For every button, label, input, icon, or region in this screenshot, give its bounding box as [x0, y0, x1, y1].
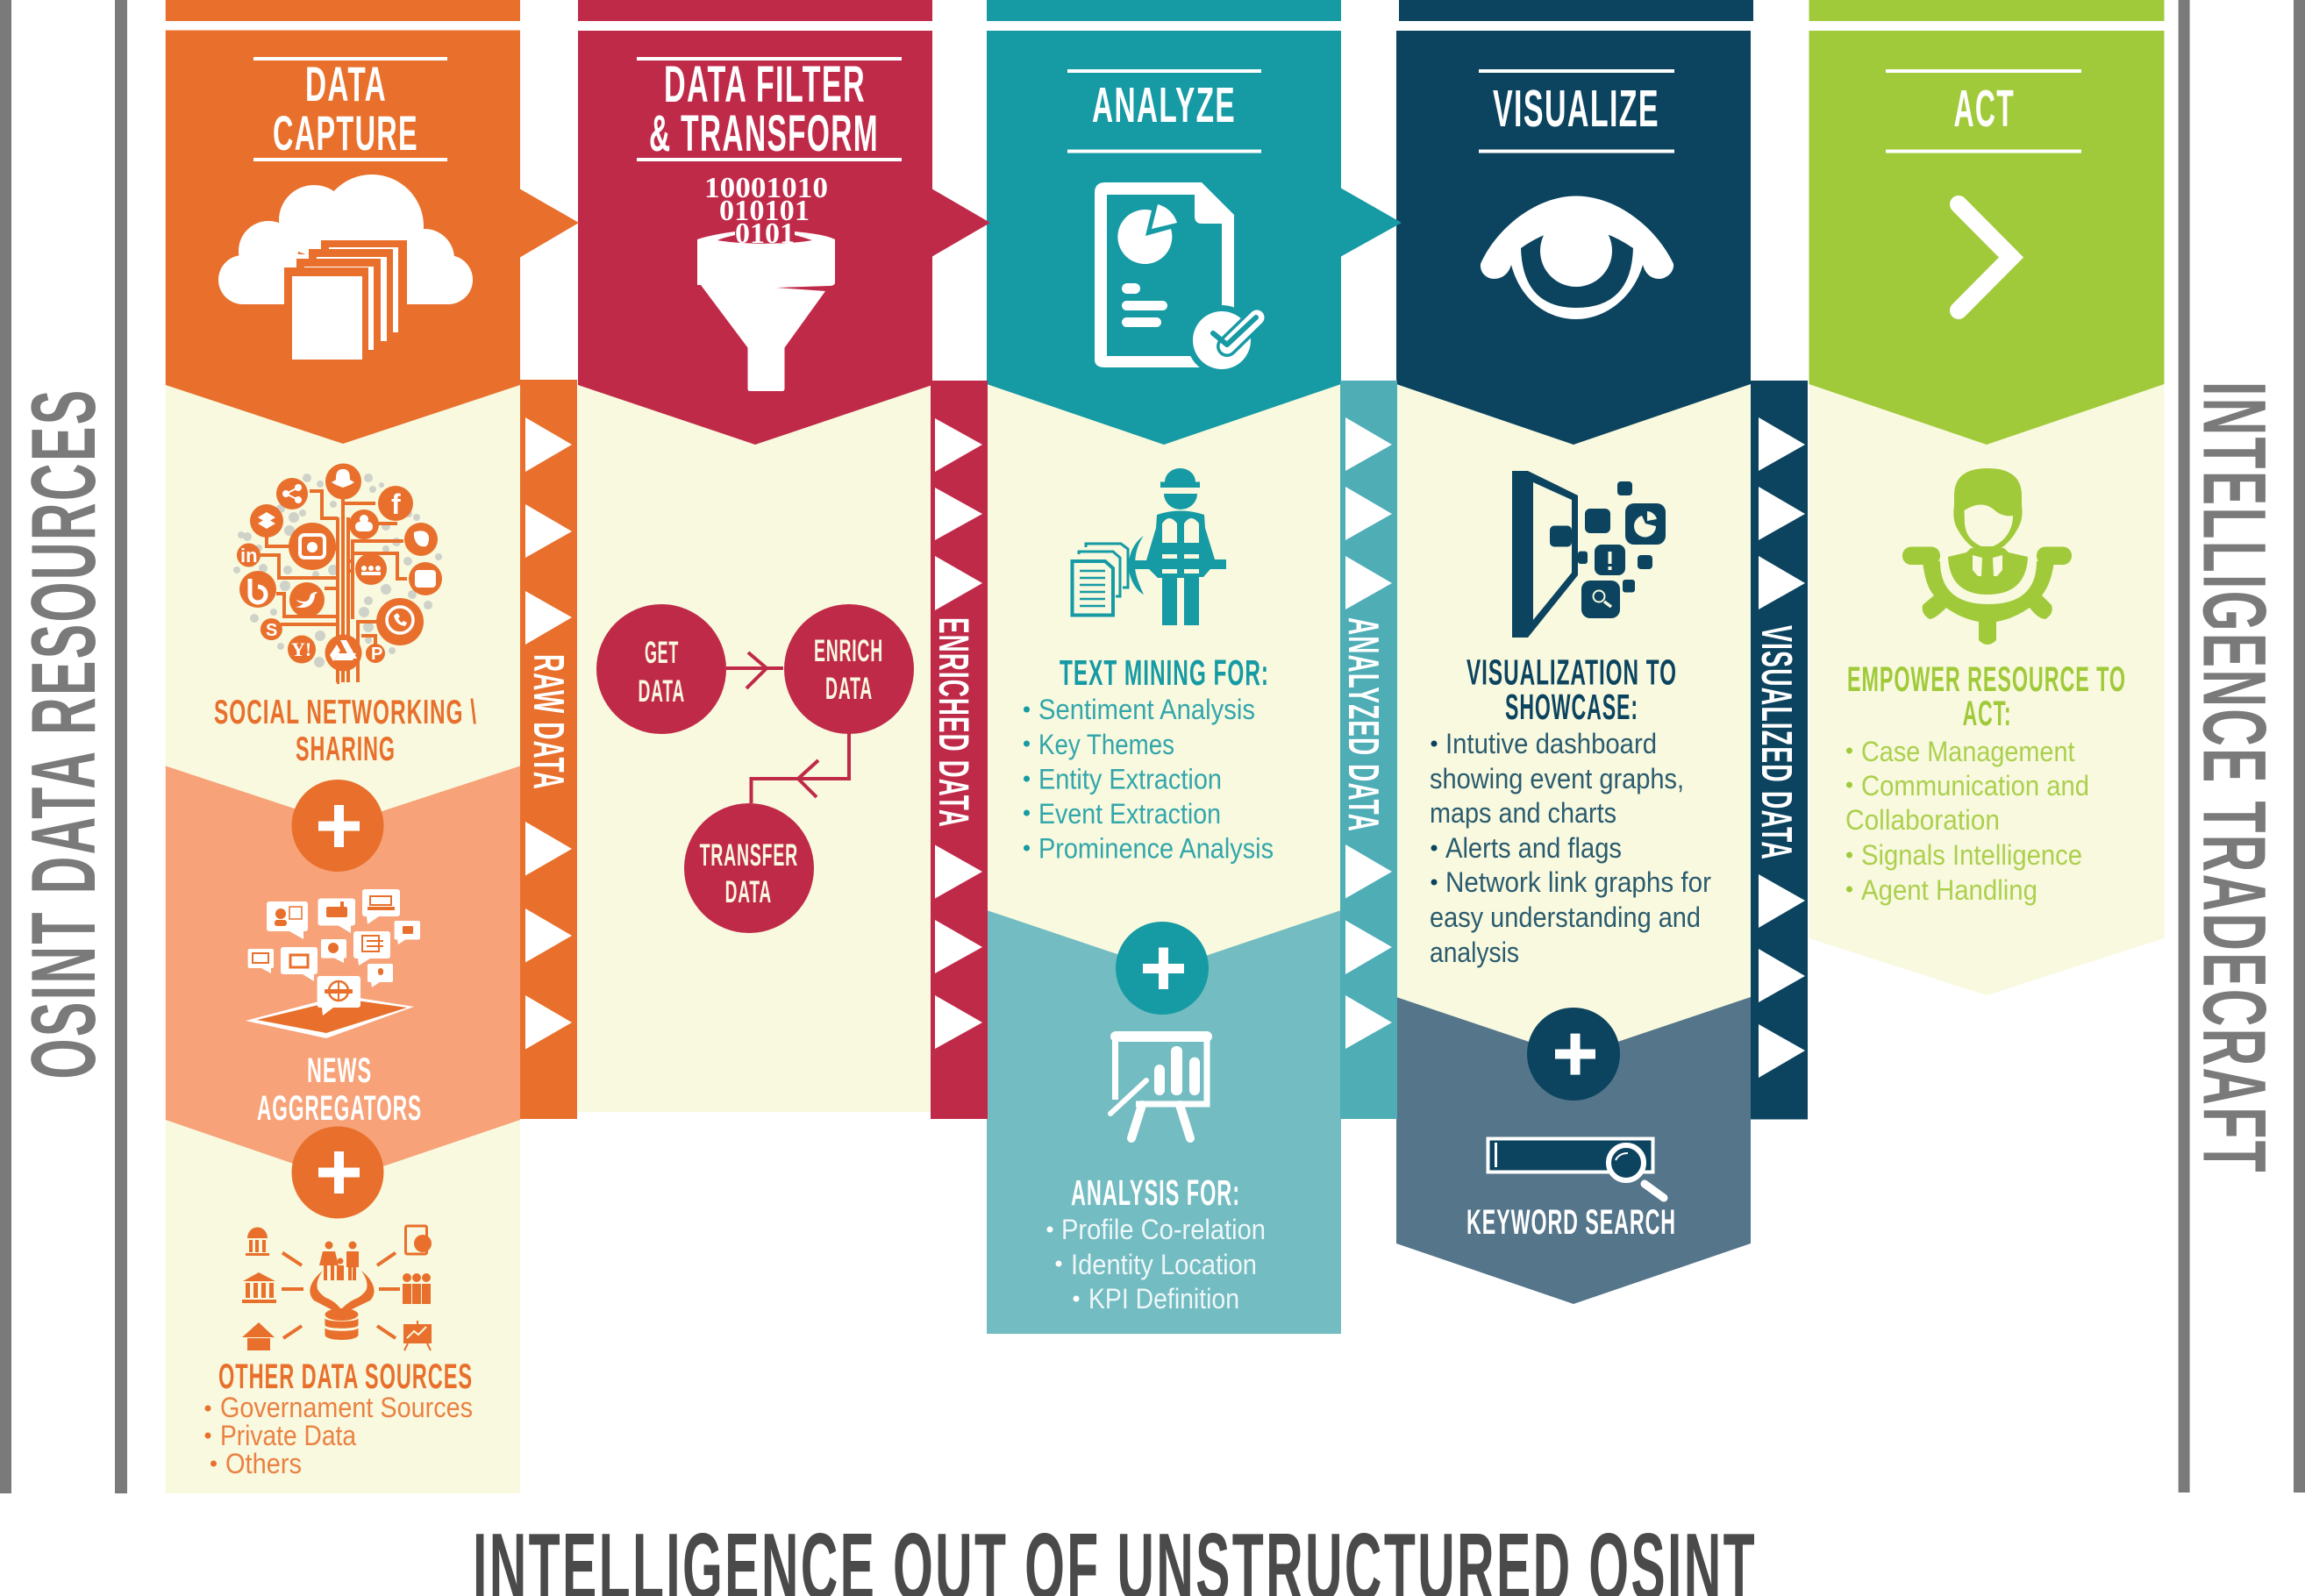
connector strip: visualized data	[1751, 381, 1808, 1119]
text block: visualization to showcase: showing event graphs,	[1430, 763, 1684, 794]
text block: text mining: Event Extraction	[1038, 798, 1221, 830]
text block: text mining: Prominence Analysis	[1038, 833, 1274, 865]
text block: empower resource to act: Collaboration	[1845, 804, 2000, 836]
step: transfer data: TRANSFER	[700, 838, 798, 873]
panel: visualize	[1396, 0, 1753, 1304]
panel: analyze	[987, 0, 1341, 1334]
connector strip: raw data	[520, 380, 577, 1119]
text block: visualization to showcase: analysis	[1430, 937, 1519, 968]
text block: visualization to showcase: easy understanding and	[1430, 901, 1701, 933]
text block: analysis for: Profile Co-relation	[1061, 1214, 1266, 1245]
panel: data filter and transform	[578, 0, 932, 1112]
text block: visualization to showcase: Intutive dashboard	[1445, 728, 1657, 759]
label: social networking: SOCIAL NETWORKING \	[214, 694, 477, 731]
arrow: data capture to filter	[519, 189, 579, 258]
icon: social network tree: f	[391, 488, 401, 520]
heading: visualize	[1479, 69, 1674, 153]
text block: visualization to showcase: maps and charts	[1430, 797, 1616, 829]
analysis for band	[987, 910, 1341, 1334]
step: enrich data	[784, 604, 914, 734]
text block: visualization to showcase: VISUALIZATION TO	[1466, 652, 1677, 693]
news aggregators band	[166, 766, 520, 1180]
plus badge	[1527, 1008, 1620, 1101]
text block: empower resource to act: ACT:	[1963, 695, 2012, 733]
icon: binary digits entering funnel: 10001010	[704, 172, 828, 204]
step: transfer data	[684, 803, 814, 933]
text block: text mining: Sentiment Analysis	[1038, 694, 1255, 725]
panel: act	[1809, 0, 2165, 995]
icon: chevron	[1959, 204, 2011, 310]
text block: analysis for	[1047, 1172, 1266, 1315]
step: get data	[596, 604, 726, 734]
text block: visualization to showcase: Network link graphs for	[1445, 866, 1711, 898]
step: get data: DATA	[639, 674, 685, 709]
text block: empower resource to act: Communication and	[1861, 770, 2089, 802]
icon: binary digits entering funnel: 010101	[719, 195, 810, 227]
arrow: analyze to visualize	[1340, 188, 1402, 257]
icon: person at helm	[1902, 468, 2072, 645]
text block: other data sources: Private Data	[220, 1420, 356, 1451]
heading: data capture: DATA	[305, 56, 387, 111]
icon: social network tree: Y!	[291, 638, 311, 660]
icon: news speech bubbles and tablet	[246, 889, 420, 1038]
heading: data filter and transform: & TRANSFORM	[649, 105, 879, 162]
left side banner	[0, 0, 127, 1493]
text block: other data sources: OTHER DATA SOURCES	[218, 1357, 473, 1396]
icon: binary digits entering funnel: 0101	[735, 217, 795, 250]
plus badge	[291, 780, 384, 872]
connector strip: enriched data: ENRICHED DATA	[930, 617, 976, 828]
label: social networking: SHARING	[296, 730, 396, 768]
label: keyword search: KEYWORD SEARCH	[1466, 1203, 1676, 1242]
heading: data filter and transform	[637, 56, 902, 162]
icon: binary digits entering funnel	[697, 172, 835, 391]
text block: text mining	[1024, 652, 1274, 865]
keyword search band	[1396, 997, 1751, 1304]
icon: social network tree: S	[266, 621, 278, 640]
text block: text mining: TEXT MINING FOR:	[1060, 652, 1269, 693]
text block: empower resource to act: Signals Intelligence	[1861, 839, 2082, 871]
icon: miner digging documents	[1072, 468, 1226, 625]
heading: data capture: CAPTURE	[273, 105, 418, 160]
heading: visualize: VISUALIZE	[1493, 80, 1659, 138]
text block: analysis for: ANALYSIS FOR:	[1071, 1172, 1240, 1213]
icon: other data sources	[242, 1226, 432, 1350]
text block: text mining: Key Themes	[1038, 729, 1174, 760]
plus badge	[1116, 922, 1209, 1015]
arrow: filter to analyze	[931, 189, 990, 257]
step: enrich data: DATA	[825, 672, 873, 706]
heading: data filter and transform: DATA FILTER	[664, 56, 866, 113]
label: news aggregators: AGGREGATORS	[257, 1089, 422, 1128]
label: news aggregators: NEWS	[307, 1051, 372, 1090]
panel: data capture	[166, 0, 520, 1493]
icon: social network tree: P	[371, 645, 383, 664]
connector strip: raw data: RAW DATA	[525, 654, 572, 790]
label: news aggregators	[257, 1051, 422, 1128]
icon: presentation board	[1110, 1031, 1212, 1138]
text block: empower resource to act: Agent Handling	[1861, 874, 2037, 906]
connector strip: analyzed data: ANALYZED DATA	[1339, 617, 1387, 832]
connector strip: enriched data	[930, 381, 988, 1119]
text block: analysis for: KPI Definition	[1088, 1283, 1239, 1315]
icon: social network tree	[233, 463, 442, 684]
right side banner	[2179, 0, 2305, 1493]
connector strip: analyzed data	[1339, 381, 1397, 1119]
plus badge	[291, 1126, 384, 1219]
heading: act	[1886, 69, 2081, 153]
text block: other data sources: Others	[225, 1448, 302, 1479]
text block: text mining: Entity Extraction	[1038, 763, 1222, 794]
text block: visualization to showcase: Alerts and flags	[1445, 832, 1622, 864]
icon: eye	[1481, 196, 1673, 319]
text block: visualization to showcase	[1430, 652, 1711, 968]
label: social networking	[214, 694, 477, 768]
text block: visualization to showcase: SHOWCASE:	[1505, 687, 1638, 727]
text block: analysis for: Identity Location	[1071, 1249, 1257, 1280]
heading: analyze	[1067, 69, 1261, 153]
flow: get, enrich, transfer	[596, 604, 914, 933]
icon: social network tree: in	[240, 545, 258, 566]
text block: other data sources: Governament Sources	[220, 1392, 473, 1423]
icon: search bar	[1488, 1138, 1664, 1198]
step: get data: GET	[645, 636, 679, 670]
text block: empower resource to act	[1845, 660, 2126, 906]
text block: other data sources	[205, 1357, 473, 1479]
heading: act: ACT	[1954, 80, 2015, 138]
heading: data capture	[253, 56, 447, 161]
icon: report with pie chart and check	[1095, 182, 1257, 375]
heading: analyze: ANALYZE	[1092, 77, 1236, 133]
step: transfer data: DATA	[725, 875, 772, 909]
connector strip: visualized data: VISUALIZED DATA	[1752, 625, 1800, 860]
icon: door with floating data tiles	[1512, 471, 1666, 638]
icon: cloud with documents	[218, 175, 473, 377]
text block: empower resource to act: Case Management	[1861, 736, 2075, 767]
step: enrich data: ENRICH	[814, 634, 883, 668]
